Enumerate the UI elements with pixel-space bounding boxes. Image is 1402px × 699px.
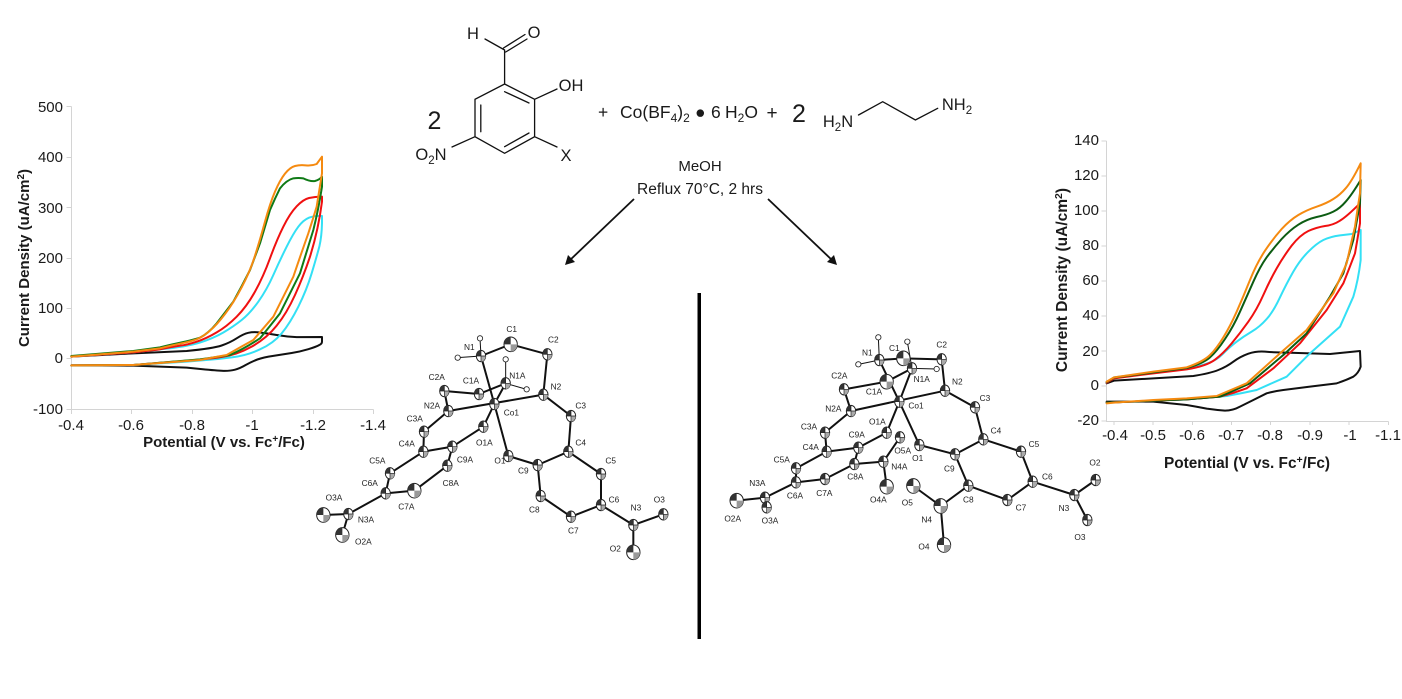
molecule: right crystal structure: C4 xyxy=(991,426,1002,436)
molecule: right crystal structure: O4A xyxy=(870,495,887,505)
molecule: left crystal structure: C4A xyxy=(399,439,415,449)
molecule: left crystal structure: C7 xyxy=(568,525,579,535)
molecule: left crystal structure: C2A xyxy=(429,372,445,382)
left chart y tick labels: 0 xyxy=(55,350,63,367)
molecule: left crystal structure: Co1 xyxy=(504,407,519,417)
molecule: right crystal structure: O4 xyxy=(918,541,930,551)
right chart x tick labels: -0.6 xyxy=(1179,427,1205,444)
stoichiometric coefficient 2: 2 xyxy=(428,107,441,135)
left chart y tick labels xyxy=(33,99,63,418)
right chart y tick labels: -20 xyxy=(1077,412,1099,429)
molecule: left crystal structure xyxy=(317,324,668,560)
molecule: left crystal structure: C1 xyxy=(506,324,517,334)
cobalt salt reagent: 2 xyxy=(738,111,745,125)
molecule: left crystal structure: C1A xyxy=(463,375,480,385)
molecule: right crystal structure: C2A xyxy=(831,371,848,381)
molecule: right crystal structure: C7A xyxy=(816,488,833,498)
right chart y tick labels: 120 xyxy=(1074,167,1099,184)
right chart x axis title: Potential (V vs. Fc xyxy=(1164,455,1297,472)
molecule: right crystal structure: N4A xyxy=(891,461,908,471)
left chart x axis title: Potential (V vs. Fc xyxy=(143,434,272,451)
reactant: nitrosalicylaldehyde structure: X xyxy=(560,147,572,165)
arrow: to right product xyxy=(768,199,837,265)
molecule: right crystal structure: C5 xyxy=(1029,439,1040,449)
molecule: left crystal structure: O2A xyxy=(355,537,372,547)
molecule: left crystal structure: C4 xyxy=(575,437,586,447)
molecule: left crystal structure: N3A xyxy=(358,515,375,525)
molecule: right crystal structure: C1A xyxy=(866,387,883,397)
molecule: right crystal structure: N1 xyxy=(862,347,873,357)
molecule: right crystal structure: C7 xyxy=(1016,502,1027,512)
right chart axes xyxy=(1102,141,1388,425)
coefficient 2 for diamine: 2 xyxy=(792,100,806,128)
chart: left cyclic voltammogram xyxy=(16,99,386,451)
left chart y tick labels: 500 xyxy=(38,99,63,116)
molecule: left crystal structure: N2 xyxy=(551,381,562,391)
molecule: right crystal structure: C5A xyxy=(774,455,790,465)
molecule: right crystal structure: N1A xyxy=(914,374,930,384)
right chart x tick labels: -0.5 xyxy=(1140,427,1166,444)
right chart x tick labels: -0.4 xyxy=(1102,427,1128,444)
right chart x tick labels xyxy=(1102,427,1401,444)
left chart x axis title: /Fc) xyxy=(278,434,305,451)
right chart x tick labels: -0.9 xyxy=(1297,427,1323,444)
molecule: left crystal structure: C5A xyxy=(369,456,386,466)
molecule: left crystal structure: N1 xyxy=(464,342,475,352)
reactant: nitrosalicylaldehyde structure: N xyxy=(435,146,447,164)
left chart y tick labels: 300 xyxy=(38,200,63,217)
right chart y tick labels: 60 xyxy=(1082,272,1099,289)
molecule: right crystal structure: C1 xyxy=(889,343,900,353)
right chart y tick labels: 20 xyxy=(1082,343,1099,360)
molecule: left crystal structure: O1 xyxy=(494,455,506,465)
molecule: left crystal structure: C8A xyxy=(443,478,459,488)
left chart y tick labels: 100 xyxy=(38,300,63,317)
left chart axes xyxy=(66,106,374,414)
molecule: right crystal structure: O2 xyxy=(1089,457,1101,467)
molecule: left crystal structure: O2 xyxy=(610,543,621,553)
molecule: left crystal structure: C6A xyxy=(362,478,378,488)
molecule: right crystal structure: C8A xyxy=(847,471,864,481)
cobalt salt reagent: O xyxy=(744,102,758,122)
left chart x tick labels: -1 xyxy=(245,417,259,434)
molecule: left crystal structure: O1A xyxy=(476,437,493,447)
molecule: right crystal structure: C3 xyxy=(980,393,991,403)
right chart x tick labels: -1 xyxy=(1343,427,1357,444)
reactant: nitrosalicylaldehyde structure: OH xyxy=(559,77,583,95)
right chart y axis title: 2 xyxy=(1053,193,1065,199)
left chart y tick labels: 200 xyxy=(38,250,63,267)
molecule: left crystal structure: C9A xyxy=(457,455,474,465)
left chart y axis title: ) xyxy=(16,169,33,174)
reactant: nitrosalicylaldehyde structure: H xyxy=(467,25,479,43)
right chart x axis title: /Fc) xyxy=(1303,455,1330,472)
left chart curves xyxy=(71,157,322,371)
molecule: left crystal structure: C3 xyxy=(575,401,586,411)
right chart y axis title: ) xyxy=(1054,188,1071,193)
molecule: right crystal structure: C6A xyxy=(787,490,804,500)
left chart y axis title: Current Density (uA/cm xyxy=(16,180,33,347)
left chart x axis title: + xyxy=(272,434,278,445)
vertical divider bar xyxy=(698,293,701,639)
reactant: nitrosalicylaldehyde structure: O xyxy=(415,146,428,164)
right chart y tick labels: 140 xyxy=(1074,132,1099,149)
molecule: right crystal structure: N2A xyxy=(825,404,842,414)
right chart y tick labels: 100 xyxy=(1074,202,1099,219)
molecule: right crystal structure: O1A xyxy=(869,416,886,426)
reaction conditions: Reflux 70°C, 2 hrs xyxy=(637,181,763,198)
molecule: left crystal structure: C9 xyxy=(518,465,529,475)
molecule: left crystal structure: C8 xyxy=(529,505,540,515)
molecule: right crystal structure: C8 xyxy=(963,495,974,505)
molecule: right crystal structure: O3 xyxy=(1074,532,1086,542)
ethylenediamine structure: N xyxy=(841,113,853,131)
reaction scheme xyxy=(415,24,972,265)
molecule: right crystal structure: C2 xyxy=(936,340,947,350)
molecule: left crystal structure: C5 xyxy=(605,455,616,465)
molecule: right crystal structure: N3A xyxy=(749,478,766,488)
left chart y tick labels: 400 xyxy=(38,149,63,166)
chart: right cyclic voltammogram xyxy=(1053,132,1401,472)
cobalt salt reagent: + xyxy=(598,102,608,122)
molecule: left crystal structure: C7A xyxy=(398,501,415,511)
molecule: left crystal structure: C6 xyxy=(609,495,620,505)
molecule: right crystal structure: N4 xyxy=(921,515,932,525)
right chart x axis title: + xyxy=(1297,454,1303,466)
right chart curves xyxy=(1107,163,1361,411)
molecule: right crystal structure: C9 xyxy=(944,464,955,474)
left chart x tick labels: -1.2 xyxy=(300,417,326,434)
ethylenediamine structure xyxy=(823,96,972,134)
cobalt salt reagent: 6 xyxy=(711,102,721,122)
cobalt salt reagent: H xyxy=(725,102,738,122)
molecule: left crystal structure: N2A xyxy=(424,400,441,410)
right chart y tick labels: 0 xyxy=(1091,377,1099,394)
reactant: nitrosalicylaldehyde structure xyxy=(415,24,583,167)
right chart x tick labels: -0.7 xyxy=(1218,427,1244,444)
molecule: right crystal structure: C9A xyxy=(849,430,865,440)
right chart x tick labels: -0.8 xyxy=(1257,427,1283,444)
reactant: nitrosalicylaldehyde structure: O xyxy=(528,24,541,42)
left chart x tick labels: -0.8 xyxy=(179,417,205,434)
molecule: left crystal structure: C3A xyxy=(407,414,423,424)
arrow: to left product xyxy=(565,199,634,265)
cobalt salt reagent: ● xyxy=(695,102,706,122)
molecule: right crystal structure: C3A xyxy=(801,421,818,431)
molecule: left crystal structure: C2 xyxy=(548,335,559,345)
molecule: left crystal structure: N1A xyxy=(509,371,526,381)
molecule: left crystal structure: O3 xyxy=(654,495,665,505)
molecule: left crystal structure: N3 xyxy=(631,502,642,512)
right chart y tick labels: 40 xyxy=(1082,307,1099,324)
ethylenediamine structure: 2 xyxy=(835,122,841,134)
left chart y axis title: 2 xyxy=(16,174,27,180)
ethylenediamine structure: 2 xyxy=(966,105,972,117)
molecule: right crystal structure xyxy=(724,335,1101,552)
reactant: nitrosalicylaldehyde structure: 2 xyxy=(428,155,435,167)
molecule: right crystal structure: C6 xyxy=(1042,471,1053,481)
molecule: left crystal structure: O3A xyxy=(326,492,343,502)
cobalt salt reagent: 2 xyxy=(683,111,690,125)
reaction conditions xyxy=(637,158,763,198)
left chart x tick labels: -0.4 xyxy=(58,417,84,434)
molecule: right crystal structure: O1 xyxy=(912,453,924,463)
right chart y tick labels: 80 xyxy=(1082,237,1099,254)
right chart y axis title: Current Density (uA/cm xyxy=(1054,199,1071,372)
ethylenediamine structure: NH xyxy=(942,96,966,114)
right chart y tick labels xyxy=(1074,132,1099,429)
molecule: right crystal structure: O2A xyxy=(724,513,741,523)
cobalt salt reagent: 4 xyxy=(671,111,678,125)
plus sign: + xyxy=(766,103,778,124)
cobalt salt reagent: Co(BF xyxy=(620,102,671,122)
molecule: right crystal structure: C4A xyxy=(803,442,819,452)
left chart x tick labels xyxy=(58,417,386,434)
reaction conditions: MeOH xyxy=(678,158,722,175)
molecule: right crystal structure: N3 xyxy=(1059,503,1070,513)
cobalt salt reagent: ) xyxy=(677,102,683,122)
molecule: right crystal structure: O3A xyxy=(762,516,779,526)
left chart x tick labels: -1.4 xyxy=(360,417,386,434)
molecule: right crystal structure: O5A xyxy=(894,445,911,455)
molecule: right crystal structure: N2 xyxy=(952,376,963,386)
ethylenediamine structure: H xyxy=(823,113,835,131)
molecule: right crystal structure: Co1 xyxy=(908,400,924,410)
molecule: right crystal structure: O5 xyxy=(902,497,913,507)
left chart x tick labels: -0.6 xyxy=(118,417,144,434)
right chart x tick labels: -1.1 xyxy=(1375,427,1401,444)
left chart y tick labels: -100 xyxy=(33,401,63,418)
